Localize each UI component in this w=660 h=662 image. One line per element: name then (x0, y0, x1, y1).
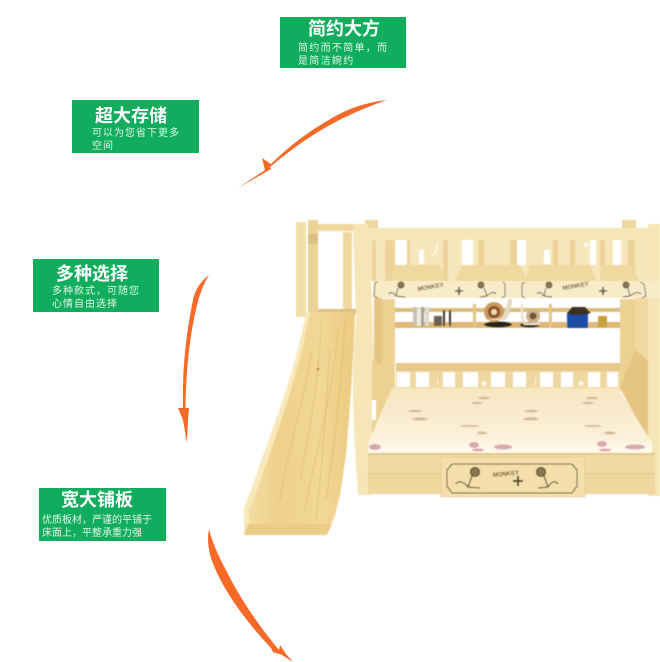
slide (244, 312, 355, 535)
text: MONKEY upper left: MONKEY (417, 282, 444, 293)
books (413, 307, 451, 326)
heading: 简约大方: 简约大方 (308, 18, 380, 39)
drawer front with carving (441, 457, 585, 497)
heading: 宽大铺板: 宽大铺板 (61, 489, 133, 510)
lower guard rail (396, 363, 620, 389)
text: 超大存储 description (92, 126, 180, 152)
snail ornaments (484, 299, 540, 328)
heading: 超大存储: 超大存储 (95, 106, 167, 126)
blue box ornament (567, 307, 607, 328)
text: 宽大铺板 description: 床面上，平整承重力强 (42, 526, 142, 539)
text: MONKEY drawer: MONKEY (493, 470, 519, 479)
text: 宽大铺板 description (42, 513, 152, 539)
arrow: middle curved arrow (178, 275, 209, 443)
text: 宽大铺板 description: 优质板材，严谨的平铺于 (42, 513, 152, 526)
monkey carvings (389, 282, 641, 297)
lower guard rail: ★ (577, 379, 585, 388)
bed back posts and top rail (365, 220, 655, 281)
side ladder rails (372, 350, 648, 440)
bed base (368, 453, 655, 494)
floral print (408, 397, 616, 434)
slide tower frame (296, 220, 356, 317)
left main post (353, 224, 375, 495)
mattress (368, 388, 652, 453)
panel: 简约大方 (280, 17, 406, 68)
heading: 多种选择: 多种选择 (56, 264, 128, 284)
illustration: bunk bed with slide (244, 220, 660, 535)
arrow: top curved arrow (238, 100, 387, 188)
text: 简约大方 description: 是简洁婉约 (298, 54, 354, 67)
panel: 宽大铺板 (39, 488, 166, 541)
panel: 超大存储 (72, 100, 199, 153)
upper guard panel with monkey carvings (373, 281, 660, 298)
lower guard rail: ★ (480, 379, 488, 388)
text: MONKEY upper right: MONKEY (562, 281, 589, 292)
arrow: bottom curved arrow (208, 529, 293, 662)
text: 简约大方 description: 简约而不简单，而 (298, 41, 388, 54)
text: 多种选择 description: 多种款式，可随您 (52, 284, 140, 297)
text: 超大存储 description: 空间 (92, 139, 114, 152)
right main post (648, 224, 660, 496)
text: 多种选择 description: 心情自由选择 (52, 297, 118, 310)
text: 超大存储 description: 可以为您省下更多 (92, 126, 180, 139)
text: 简约大方 description (298, 41, 388, 67)
text: 多种选择 description (52, 284, 140, 310)
panel: 多种选择 (33, 259, 159, 312)
bookshelf (374, 298, 648, 408)
